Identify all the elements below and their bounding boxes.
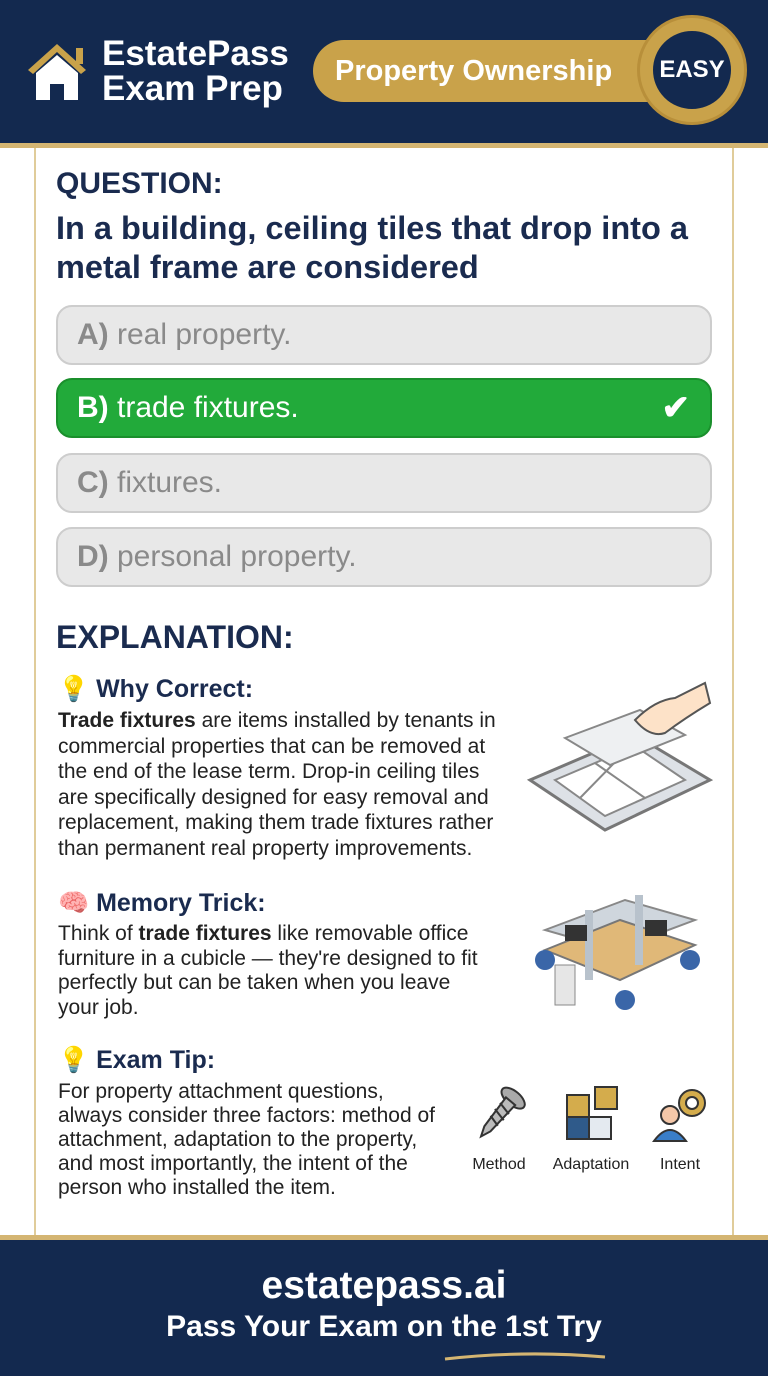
logo text: EstatePass [102, 34, 289, 73]
question label: QUESTION: [56, 167, 223, 200]
option B correct [56, 378, 712, 438]
footer url: estatepass.ai [262, 1264, 506, 1307]
footer [0, 1235, 768, 1376]
question text: In a building, ceiling tiles that drop into a metal frame are considered [56, 210, 688, 285]
illustration: cubicles [535, 895, 700, 1010]
header [0, 0, 768, 143]
exam tip text: For property attachment questions, always consider three factors: method of attachment, adaptation to the property, and most importantly, the intent of the person who installed the item. [58, 1080, 435, 1199]
why correct heading: 💡 Why Correct: [58, 675, 253, 703]
exam tip heading: 💡 Exam Tip: [58, 1046, 215, 1074]
option D: D) personal property. [77, 540, 357, 573]
category pill: Property Ownership [335, 55, 612, 87]
logo text [102, 34, 289, 108]
option A [56, 305, 712, 365]
option A: A) real property. [77, 318, 292, 351]
memory trick text: Think of trade fixtures like removable office furniture in a cubicle — they're designed to fit perfectly but can be taken when you leave your job. [58, 922, 478, 1018]
icon: intent: Intent [660, 1156, 700, 1173]
icon: adaptation puzzle: Adaptation [553, 1156, 629, 1173]
logo text: Exam Prep [102, 69, 283, 108]
option D [56, 527, 712, 587]
memory trick heading: 🧠 Memory Trick: [58, 889, 266, 917]
option C [56, 453, 712, 513]
option B correct: ✔ [662, 389, 690, 427]
icon: method screw: Method [472, 1156, 526, 1173]
badge: EASY [640, 18, 744, 122]
why correct text: Trade fixtures are items installed by tenants in commercial properties that can be removed at the end of the lease term. Drop-in ceiling tiles are specifically designed for easy removal and replacement, making them trade fixtures rather than permanent real property improvements. [58, 709, 496, 860]
badge: EASY: EASY [659, 56, 725, 83]
illustration: ceiling tile [527, 682, 713, 832]
footer tagline: Pass Your Exam on the 1st Try [166, 1310, 602, 1343]
option B correct: B) trade fixtures. [77, 391, 299, 424]
option C: C) fixtures. [77, 466, 222, 499]
explanation heading: EXPLANATION: [56, 619, 294, 655]
icon: house [28, 44, 86, 100]
icon: adaptation puzzle [552, 1086, 629, 1173]
icon: intent [652, 1089, 706, 1173]
icon: method screw [472, 1086, 526, 1173]
category pill [313, 40, 683, 102]
